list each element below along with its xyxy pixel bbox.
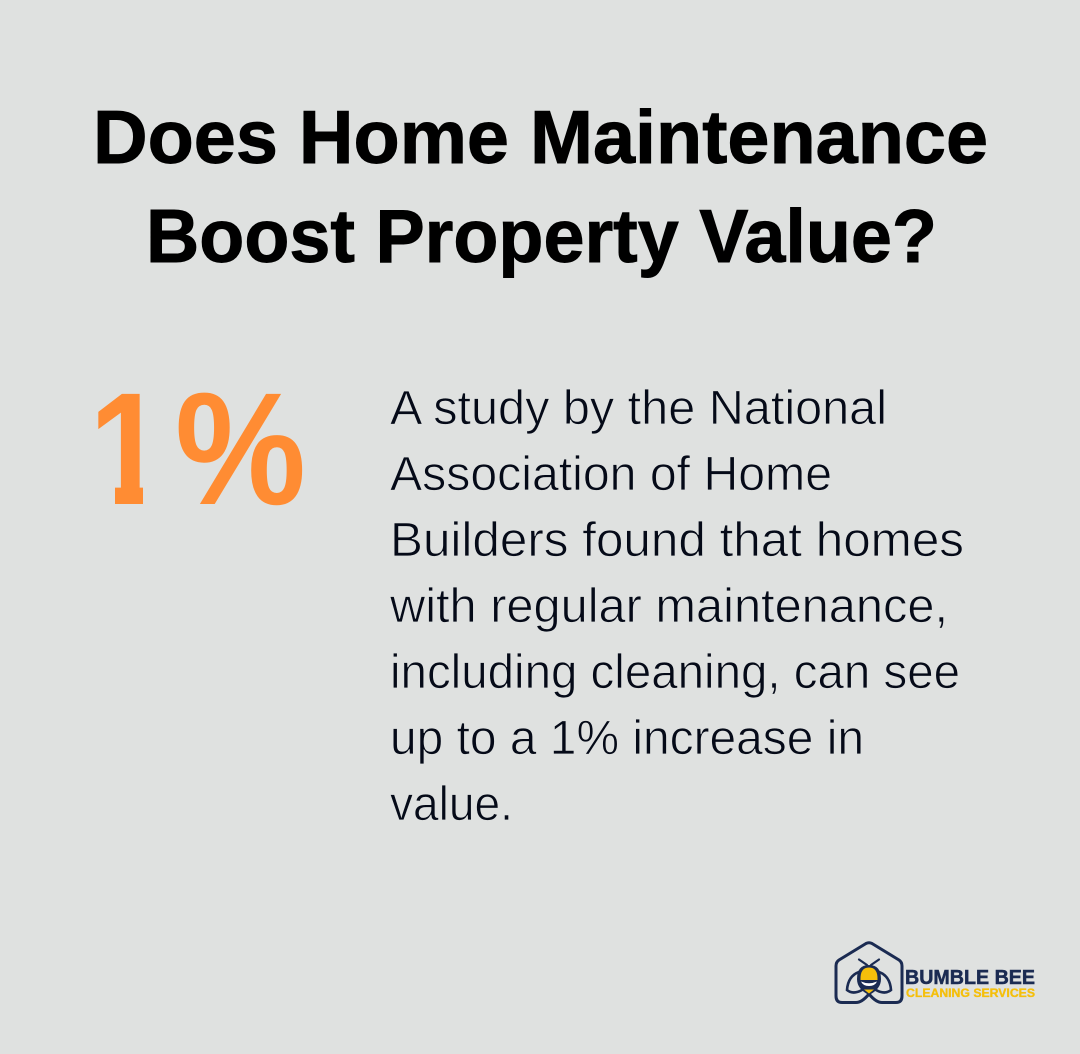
body text: Builders found that homes — [390, 514, 964, 567]
big statistic: 1%: % — [175, 359, 306, 538]
body text — [389, 382, 964, 831]
body text: including cleaning, can see — [390, 646, 960, 699]
title: Does Home Maintenance — [93, 95, 988, 179]
body text: with regular maintenance, — [389, 580, 948, 633]
logo: Bumble Bee Cleaning Services — [836, 943, 1035, 1002]
body text: A study by the National — [390, 382, 887, 435]
body text: up to a 1% increase in — [390, 712, 864, 765]
logo tagline: CLEANING SERVICES — [906, 986, 1035, 1000]
icon: house outline — [836, 943, 902, 1002]
big statistic: 1% — [98, 392, 302, 506]
logo wordmark: BUMBLE BEE — [905, 967, 1035, 989]
body text: Association of Home — [390, 448, 832, 501]
title — [93, 95, 988, 278]
infographic canvas — [98, 108, 1035, 1004]
body text: value. — [390, 778, 513, 831]
icon: bee — [847, 960, 891, 995]
big statistic: 1%: 1 — [89, 359, 165, 538]
title: Boost Property Value? — [146, 194, 937, 278]
